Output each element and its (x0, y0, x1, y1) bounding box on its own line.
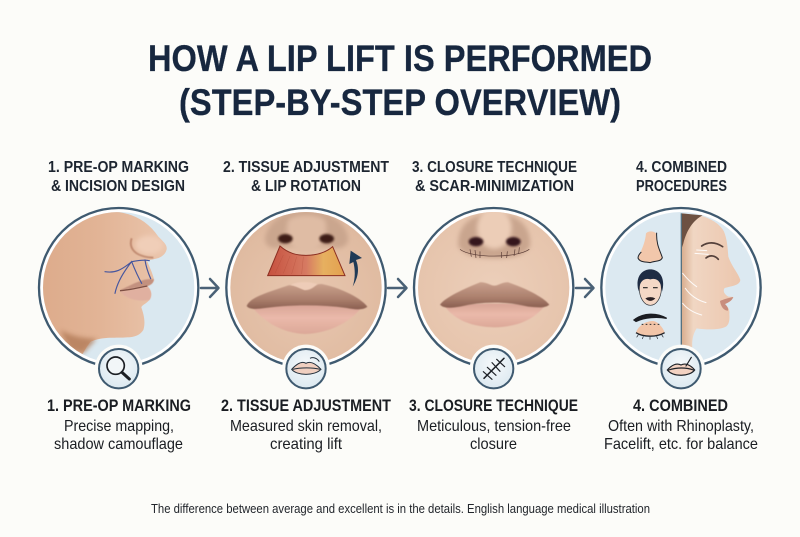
icon: eye (634, 314, 667, 340)
nose tip (477, 208, 512, 249)
hair (682, 213, 703, 248)
ring gap and badge (657, 345, 705, 393)
step headings (48, 159, 727, 195)
caption 2 (221, 396, 392, 453)
icon: lips (292, 358, 321, 374)
caption 1: shadow camouflage (54, 436, 183, 453)
icon: magnifying glass (107, 357, 129, 379)
arrow (576, 279, 594, 297)
caption 2: Measured skin removal, (230, 418, 382, 435)
panel: step 3 closure technique (413, 208, 573, 393)
caption 2: creating lift (270, 436, 343, 453)
ring gap and badge (282, 345, 330, 393)
nose (458, 213, 530, 258)
footer note: The difference between average and excellent is in the details. English language medical illustration (151, 502, 650, 516)
caption 3: closure (470, 436, 517, 453)
lower lip (253, 304, 361, 334)
caption 3 (409, 396, 578, 453)
ring gap and badge (470, 345, 518, 393)
step headings: & SCAR-MINIMIZATION (415, 178, 574, 195)
caption 4: Often with Rhinoplasty, (608, 418, 754, 435)
caption 4: 4. COMBINED (633, 396, 728, 415)
nose tip highlight (135, 236, 163, 254)
lower lip (445, 304, 544, 327)
step headings: PROCEDURES (636, 178, 727, 195)
lift arrow (349, 251, 362, 287)
arrow (388, 279, 406, 297)
nose shading (131, 238, 153, 258)
step headings: 4. COMBINED (636, 159, 727, 176)
tissue fibres (275, 255, 303, 274)
caption 2: 2. TISSUE ADJUSTMENT (221, 396, 392, 415)
panel: step 4 combined procedures (600, 208, 763, 393)
nose (265, 210, 348, 248)
excised tissue (268, 246, 345, 276)
arrow (201, 279, 218, 297)
step headings: 2. TISSUE ADJUSTMENT (223, 159, 389, 176)
captions (47, 396, 758, 453)
caption 1 (47, 396, 191, 453)
incision marking lines (105, 260, 151, 293)
nose tip (287, 215, 326, 253)
contour lines (683, 250, 708, 315)
title (148, 37, 652, 123)
sutures (460, 247, 529, 258)
title: HOW A LIP LIFT IS PERFORMED (148, 37, 652, 79)
step headings: & LIP ROTATION (251, 178, 361, 195)
ring gap and badge (95, 345, 143, 393)
panel: step 1 pre-op marking (33, 203, 200, 393)
face profile (682, 213, 740, 347)
title: (STEP-BY-STEP OVERVIEW) (179, 81, 621, 123)
step headings: 1. PRE-OP MARKING (48, 159, 189, 176)
upper lip (247, 284, 367, 309)
caption 4 (604, 396, 758, 453)
jaw shadow (60, 330, 97, 353)
nostrils (469, 237, 521, 246)
face profile (43, 212, 167, 354)
lip notch (291, 282, 317, 290)
upper lip (440, 282, 549, 308)
caption 3: Meticulous, tension-free (417, 418, 571, 435)
icon: nose (638, 231, 662, 263)
step headings: & INCISION DESIGN (51, 178, 185, 195)
caption 1: 1. PRE-OP MARKING (47, 396, 191, 415)
icon: lips with scalpel (667, 357, 695, 375)
nostrils (278, 234, 334, 243)
divider (681, 213, 682, 347)
caption 4: Facelift, etc. for balance (604, 436, 758, 453)
panel: step 2 tissue adjustment (226, 208, 387, 393)
caption 1: Precise mapping, (64, 418, 174, 435)
lips (720, 297, 733, 311)
lips (120, 279, 154, 290)
icon: face (638, 269, 663, 305)
caption 3: 3. CLOSURE TECHNIQUE (409, 396, 578, 415)
eye and brow (702, 243, 723, 259)
icon: sutures (483, 358, 505, 379)
step headings: 3. CLOSURE TECHNIQUE (412, 159, 577, 176)
